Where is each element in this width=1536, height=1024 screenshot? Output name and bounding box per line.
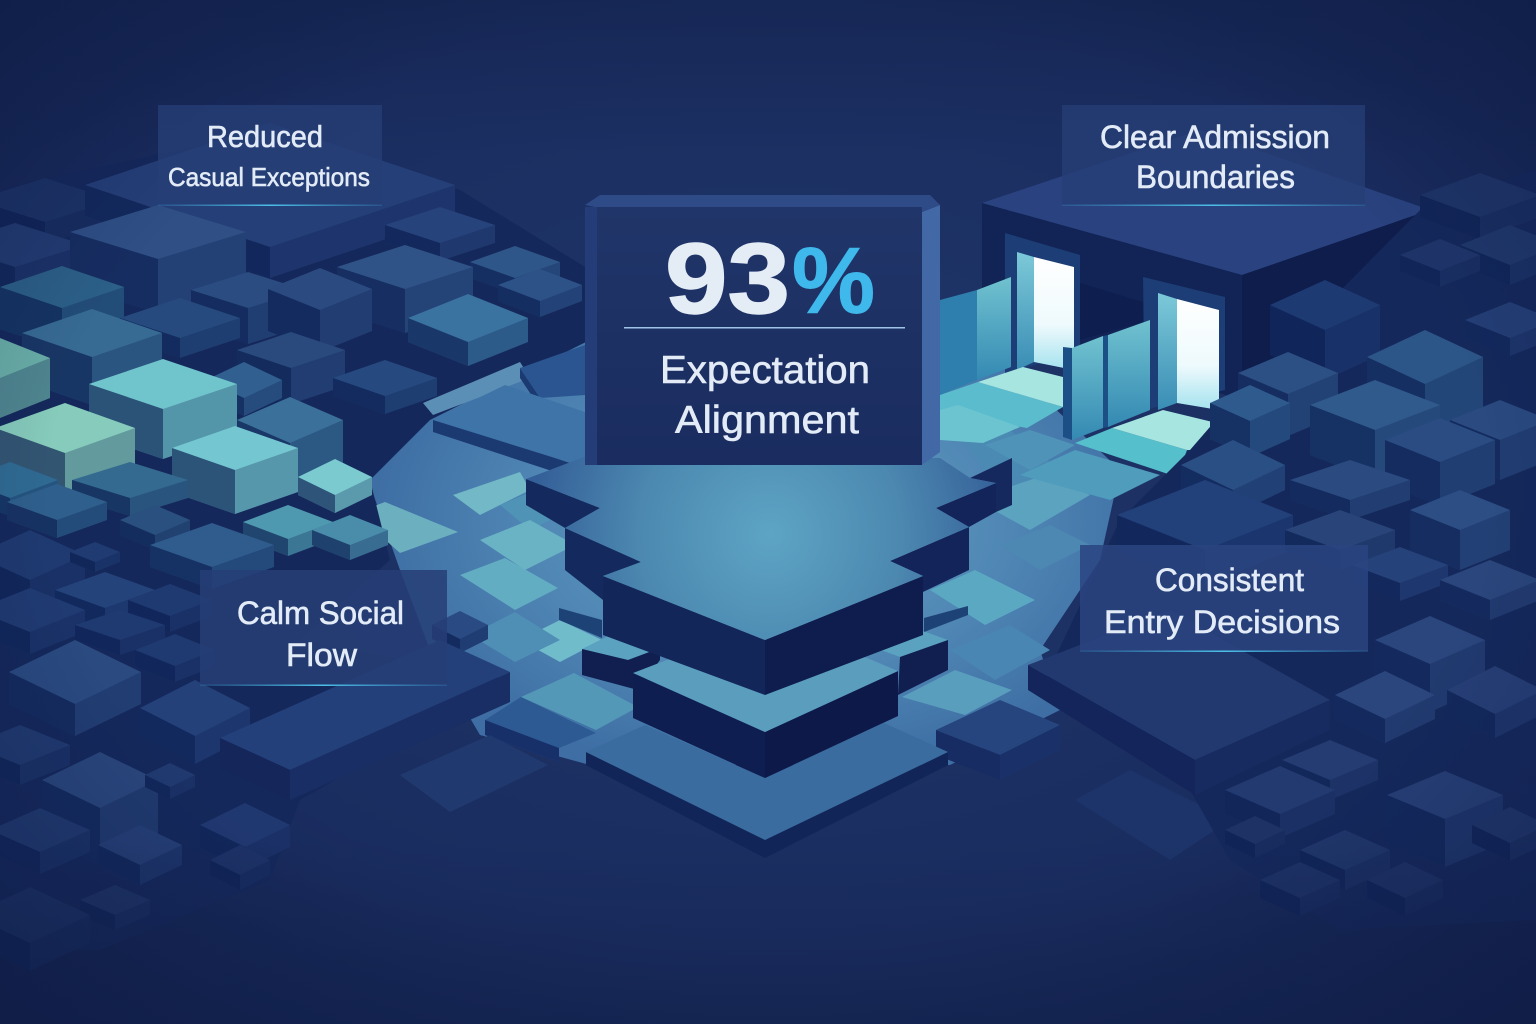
- stat value: [665, 223, 875, 335]
- callout: reduced casual exceptions: Reduced: [207, 119, 323, 154]
- callout: consistent entry decisions: Entry Decisions: [1104, 604, 1340, 640]
- stat label: Alignment: [675, 399, 859, 442]
- low wall panels: [940, 277, 1150, 440]
- floor light: [940, 367, 1225, 500]
- middle tier: [633, 655, 898, 778]
- callout: reduced casual exceptions: Casual Exceptions: [168, 162, 370, 192]
- stat label: [660, 349, 870, 442]
- callout: calm social flow: [200, 570, 447, 686]
- stat value: %: [792, 228, 875, 333]
- lit floor: [340, 300, 1230, 860]
- callout: consistent entry decisions: Consistent: [1155, 562, 1304, 598]
- central stat panel: [585, 195, 940, 465]
- door: right lit doorway: [1143, 277, 1225, 410]
- callout: consistent entry decisions: [1080, 545, 1368, 652]
- top tier: [526, 457, 1012, 695]
- door: left lit doorway: [1005, 233, 1080, 375]
- side steps: [559, 606, 968, 695]
- base tier: [586, 723, 948, 858]
- callout: calm social flow: Calm Social: [237, 595, 404, 631]
- central stepped platform: [526, 457, 1012, 858]
- plates beside the central panel: [423, 345, 585, 472]
- stat value: 93: [665, 223, 790, 335]
- callout: reduced casual exceptions: [158, 105, 382, 206]
- callout: clear admission boundaries: Clear Admission: [1100, 119, 1330, 155]
- callout: calm social flow: Flow: [286, 637, 358, 673]
- stat label: Expectation: [660, 349, 870, 392]
- callout: clear admission boundaries: [1062, 105, 1365, 206]
- callout: clear admission boundaries: Boundaries: [1136, 159, 1295, 195]
- block field: right: [1028, 170, 1536, 930]
- block field: left: [0, 123, 590, 971]
- door building: [940, 130, 1430, 500]
